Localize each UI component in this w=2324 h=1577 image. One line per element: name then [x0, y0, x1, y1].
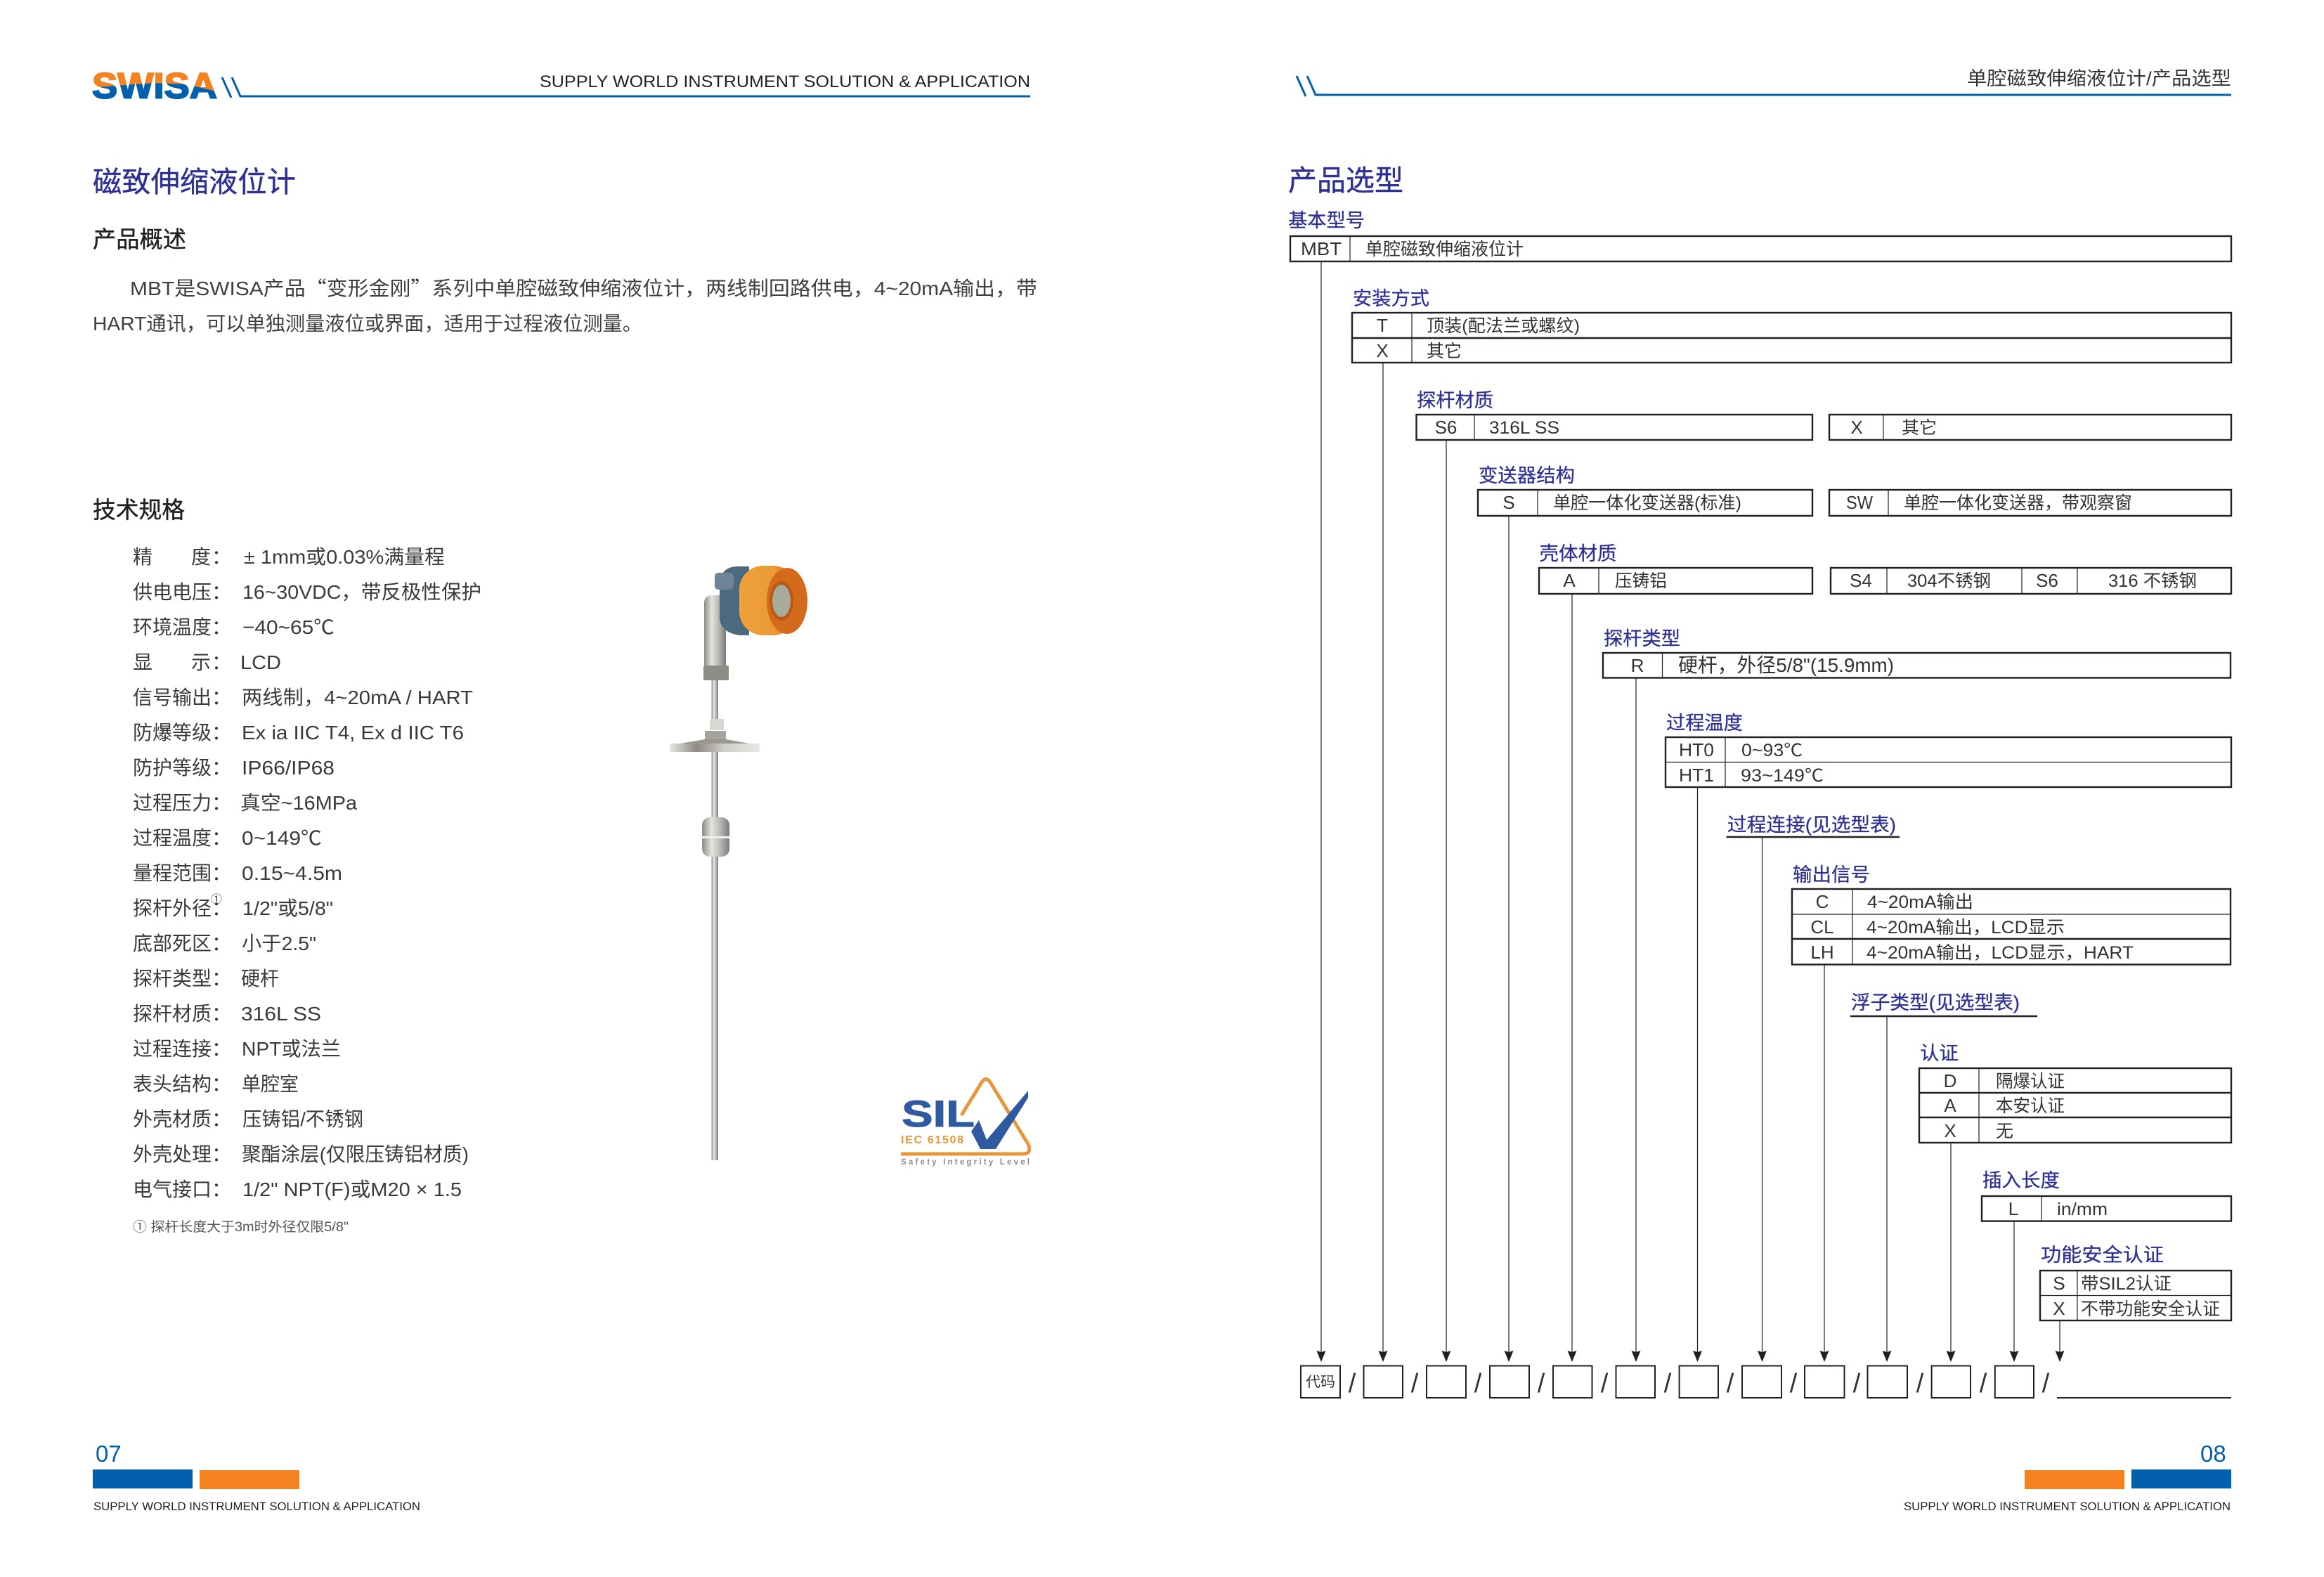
spec list: ± 1mm或0.03%满量程	[244, 546, 445, 568]
footer bar: orange	[2025, 1470, 2124, 1489]
spec list: 过程连接：	[133, 1038, 231, 1060]
table: mounting: 顶装(配法兰或螺纹)	[1427, 316, 1580, 336]
table: housing material: 压铸铝	[1615, 571, 1667, 591]
table: mounting: T	[1377, 315, 1388, 336]
label: functional safety certification: 功能安全认证	[2041, 1245, 2164, 1266]
spec list: 过程压力：	[133, 792, 231, 814]
spec list: 信号输出：	[133, 687, 231, 708]
order code row: /	[1790, 1369, 1798, 1398]
table: transmitter structure: S	[1502, 492, 1515, 513]
spec list: NPT或法兰	[242, 1038, 341, 1060]
table: output signal	[1792, 889, 2231, 964]
table: process temperature: 0~93℃	[1741, 741, 1803, 760]
spec list: 精	[133, 546, 152, 568]
table: probe material	[1417, 415, 2231, 440]
spec list: 环境温度：	[133, 616, 231, 638]
table: process temperature	[1666, 737, 2231, 787]
label: probe material: 探杆材质	[1417, 390, 1493, 411]
table: transmitter structure	[1478, 490, 2231, 516]
spec list: 0.15~4.5m	[242, 862, 342, 884]
table: certification	[1919, 1068, 2231, 1143]
table: base model	[1290, 236, 2231, 261]
spec list: 1/2" NPT(F)或M20 × 1.5	[242, 1179, 462, 1200]
logo: SIL IEC 61508: SIL	[902, 1093, 975, 1135]
order code row	[1301, 1366, 2231, 1398]
logo: SWISA: SWISA	[92, 66, 217, 105]
table: output signal: LH	[1810, 942, 1834, 963]
table: insertion length	[1982, 1196, 2231, 1221]
table: functional safety certification: S	[2053, 1273, 2065, 1294]
table: mounting: 其它	[1427, 342, 1462, 361]
order code row: /	[1538, 1369, 1545, 1398]
spec list: 电气接口：	[133, 1179, 231, 1200]
footer tagline: SUPPLY WORLD INSTRUMENT SOLUTION & APPLICATION	[93, 1500, 420, 1513]
table: certification: D	[1944, 1070, 1956, 1091]
spec list: −40~65℃	[242, 616, 335, 638]
spec list: 供电电压：	[133, 581, 231, 603]
table: housing material: 316 不锈钢	[2108, 571, 2197, 591]
heading: product overview: 产品概述	[93, 226, 186, 252]
label: process temperature: 过程温度	[1666, 713, 1743, 734]
table: probe material: X	[1850, 417, 1863, 438]
spec list: 底部死区：	[133, 933, 231, 954]
table: certification: 无	[1996, 1122, 2013, 1141]
spec list: 1/2"或5/8"	[242, 897, 333, 919]
table: mounting	[1352, 313, 2231, 363]
spec list: 度	[191, 546, 211, 568]
spec list: 两线制，4~20mA / HART	[242, 687, 473, 708]
table: base model: MBT	[1301, 238, 1342, 259]
footer bar: blue	[2131, 1469, 2231, 1488]
table: mounting: X	[1376, 340, 1389, 361]
spec list: 表头结构：	[133, 1073, 231, 1095]
table: probe material: S6	[1435, 417, 1457, 438]
logo: SIL IEC 61508: Safety Integrity Level	[901, 1158, 1030, 1167]
label: process connection: 过程连接(见选型表)	[1727, 815, 1896, 836]
label: insertion length: 插入长度	[1982, 1170, 2060, 1191]
order code row: /	[1411, 1369, 1419, 1398]
table: probe material: 其它	[1902, 418, 1937, 438]
table: probe material: 316L SS	[1489, 418, 1559, 438]
spec list: 316L SS	[241, 1003, 321, 1025]
spec list: Ex ia IIC T4, Ex d IIC T6	[242, 722, 464, 744]
logo: SWISA	[92, 72, 217, 99]
spec list	[133, 546, 481, 1200]
table: process temperature: 93~149℃	[1741, 766, 1824, 786]
table: probe type	[1603, 653, 2231, 677]
table: functional safety certification	[2040, 1271, 2231, 1320]
spec list: 量程范围：	[133, 862, 231, 884]
header title: 单腔磁致伸缩液位计/产品选型	[1967, 68, 2231, 89]
spec list: 外壳材质：	[133, 1108, 231, 1130]
connector lines and arrows	[1317, 261, 2065, 1362]
footnote: ① 探杆长度大于3m时外径仅限5/8"	[133, 1219, 349, 1235]
table: transmitter structure: 单腔一体化变送器(标准)	[1553, 493, 1741, 513]
order code row: /	[1853, 1369, 1861, 1398]
overview paragraph	[93, 273, 1037, 335]
spec list: ：	[212, 651, 231, 673]
logo: SIL IEC 61508: IEC 61508	[901, 1134, 963, 1146]
spec list: 外壳处理：	[133, 1143, 231, 1165]
table: probe type: 硬杆，外径5/8"(15.9mm)	[1678, 654, 1894, 676]
spec list: ：	[212, 546, 231, 568]
footer bar: blue	[93, 1469, 193, 1488]
table: functional safety certification: X	[2053, 1298, 2065, 1319]
spec list: 硬杆	[241, 968, 279, 989]
spec list: 小于2.5"	[242, 933, 316, 954]
table: housing material: A	[1563, 570, 1576, 591]
table: housing material: S4	[1850, 570, 1872, 591]
order code row: /	[1727, 1369, 1734, 1398]
order code row: /	[1474, 1369, 1482, 1398]
label: probe type: 探杆类型	[1604, 628, 1680, 649]
header rule with slashes	[222, 77, 1030, 98]
spec list: IP66/IP68	[242, 757, 335, 779]
table: housing material: 304不锈钢	[1907, 571, 1991, 591]
table: certification: 本安认证	[1996, 1096, 2065, 1116]
table: functional safety certification: 带SIL2认证	[2081, 1274, 2172, 1294]
table: housing material: S6	[2036, 570, 2058, 591]
spec list: 探杆外径：	[133, 897, 231, 919]
table: probe type: R	[1631, 655, 1644, 676]
panel: left page	[92, 66, 1037, 1513]
spec list: 显	[133, 651, 152, 673]
order code row: /	[2042, 1369, 2050, 1398]
label: mounting: 安装方式	[1353, 288, 1429, 309]
table: certification: X	[1944, 1120, 1956, 1141]
spec list: 16~30VDC，带反极性保护	[242, 581, 481, 603]
spec list: 聚酯涂层(仅限压铸铝材质)	[242, 1143, 469, 1165]
product illustration: magnetostrictive level gauge	[670, 566, 807, 1160]
label: transmitter structure: 变送器结构	[1479, 465, 1575, 486]
spec list: 过程温度：	[133, 827, 231, 849]
order code row: 代码	[1306, 1374, 1335, 1390]
label: float type: 浮子类型(见选型表)	[1851, 992, 2020, 1013]
overview paragraph: HART通讯，可以单独测量液位或界面，适用于过程液位测量。	[93, 313, 642, 335]
spec list: 防爆等级：	[133, 722, 231, 744]
title: product selection: 产品选型	[1288, 164, 1403, 197]
footer bar: orange	[200, 1470, 299, 1489]
logo: SWISA: SWISA	[92, 66, 217, 105]
header tagline: SUPPLY WORLD INSTRUMENT SOLUTION & APPLICATION	[540, 72, 1030, 91]
panel: right page	[1288, 68, 2231, 1513]
label: base model: 基本型号	[1288, 210, 1365, 231]
spec list: 0~149℃	[242, 827, 322, 849]
table: process temperature: HT0	[1679, 739, 1714, 760]
spec list: LCD	[240, 651, 281, 673]
order code row: /	[1664, 1369, 1672, 1398]
title: 磁致伸缩液位计	[93, 166, 296, 198]
table: output signal: CL	[1810, 916, 1834, 937]
order code row: /	[1980, 1369, 1987, 1398]
table: certification: 隔爆认证	[1996, 1072, 2065, 1091]
table: output signal: 4~20mA输出，LCD显示，HART	[1867, 943, 2134, 963]
order code row: /	[1916, 1369, 1924, 1398]
overview paragraph: MBT是SWISA产品 “变形金刚 ”系列中单腔磁致伸缩液位计，两线制回路供电，4~20mA输出，带	[130, 273, 1037, 301]
label: certification: 认证	[1920, 1043, 1959, 1064]
heading: technical specifications: 技术规格	[93, 497, 185, 523]
table: output signal: 4~20mA输出	[1867, 893, 1973, 912]
header rule with slashes	[1297, 76, 2231, 96]
table: certification: A	[1944, 1095, 1956, 1116]
spec list: 示	[191, 651, 211, 673]
order code row: /	[1601, 1369, 1609, 1398]
spec list: 探杆类型：	[133, 968, 231, 989]
table: insertion length: L	[2008, 1198, 2018, 1219]
label: output signal: 输出信号	[1793, 864, 1870, 885]
page number 07: 07	[96, 1441, 122, 1467]
spec list: 防护等级：	[133, 757, 231, 779]
table: functional safety certification: 不带功能安全认证	[2081, 1299, 2220, 1319]
spec list: ①	[211, 893, 222, 906]
spec list: 压铸铝/不锈钢	[242, 1108, 363, 1130]
table: housing material	[1539, 568, 2231, 594]
logo: SIL IEC 61508	[901, 1079, 1030, 1167]
table: output signal: 4~20mA输出，LCD显示	[1867, 918, 2065, 937]
table: insertion length: in/mm	[2057, 1200, 2108, 1219]
table: transmitter structure: 单腔一体化变送器，带观察窗	[1904, 493, 2132, 513]
table: process temperature: HT1	[1679, 765, 1714, 786]
spec list: 探杆材质：	[133, 1003, 231, 1025]
page number 08: 08	[2200, 1441, 2226, 1467]
table: base model: 单腔磁致伸缩液位计	[1365, 240, 1524, 259]
spec list: 真空~16MPa	[240, 792, 357, 814]
table: output signal: C	[1816, 891, 1829, 912]
table: transmitter structure: SW	[1846, 492, 1873, 513]
label: housing material: 壳体材质	[1539, 543, 1616, 564]
order code row: /	[1349, 1369, 1356, 1398]
footer tagline: SUPPLY WORLD INSTRUMENT SOLUTION & APPLICATION	[1904, 1500, 2231, 1513]
spec list: 单腔室	[242, 1073, 299, 1095]
